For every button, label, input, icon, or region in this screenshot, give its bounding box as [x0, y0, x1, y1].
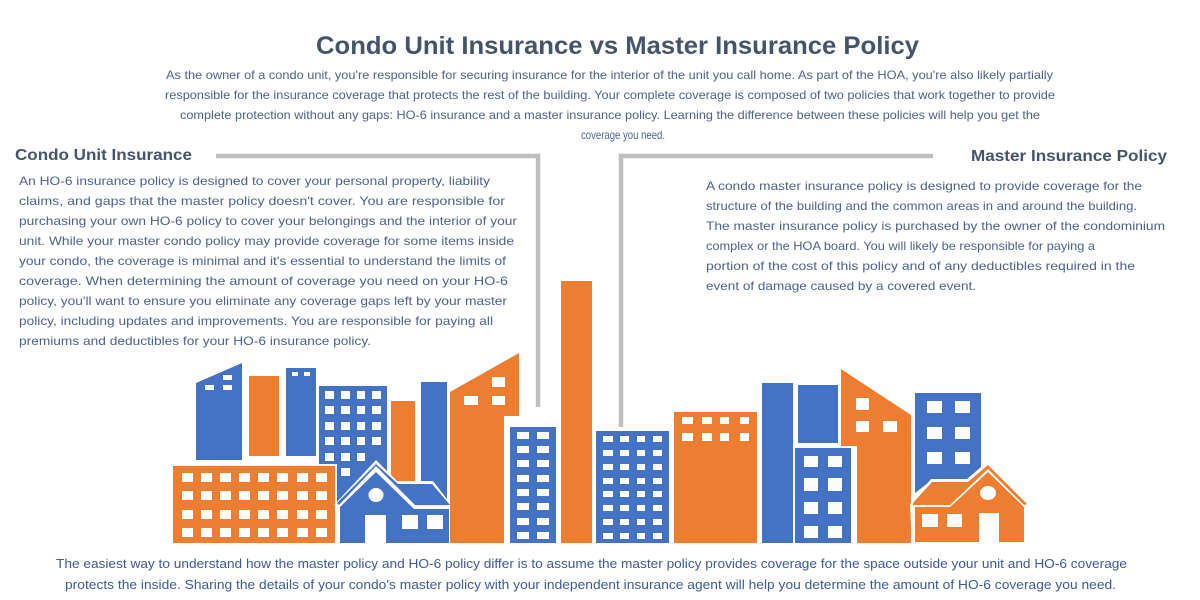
text block: condo unit insurance: An HO-6 insurance policy is designed to cover your personal property, liability	[19, 174, 490, 188]
text block: condo unit insurance	[19, 174, 517, 348]
text block: master insurance policy: The master insurance policy is purchased by the owner of the condominium	[706, 219, 1165, 233]
connector: left heading to buildings	[216, 156, 538, 407]
text block: condo unit insurance: policy, you'll want to ensure you eliminate any coverage gaps left by your master	[19, 294, 507, 308]
intro text block: complete protection without any gaps: HO-6 insurance and a master insurance policy. Learning the difference between these policies will help you get the	[180, 108, 1040, 122]
text block: condo unit insurance: claims, and gaps that the master policy doesn't cover. You are responsible for	[19, 194, 505, 208]
building: orange apartment block	[171, 464, 337, 545]
intro text block	[165, 68, 1055, 142]
connector: right heading to buildings	[621, 156, 933, 427]
building: blue tower centre right	[596, 431, 669, 543]
text block: master insurance policy: A condo master insurance policy is designed to provide coverage for the	[706, 179, 1142, 193]
text block: condo unit insurance: unit. While your master condo policy may provide coverage for some items inside	[19, 234, 514, 248]
text block: condo unit insurance: policy, including updates and improvements. You are responsible for paying all	[19, 314, 493, 328]
icon: orange house	[910, 461, 1030, 545]
text block: master insurance policy: complex or the HOA board. You will likely be responsible for paying a	[706, 239, 1095, 253]
title: Condo Unit Insurance vs Master Insurance Policy	[316, 32, 919, 60]
footer text block: protects the inside. Sharing the details of your condo's master policy with your independent insurance agent will help you determine the amount of HO-6 coverage you need.	[65, 578, 1116, 592]
text block: condo unit insurance: your condo, the coverage is minimal and it's essential to understand the limits of	[19, 254, 507, 268]
text block: condo unit insurance: purchasing your own HO-6 policy to cover your belongings and the interior of your	[19, 214, 517, 228]
text block: master insurance policy: portion of the cost of this policy and of any deductibles required in the	[706, 259, 1135, 273]
icon: blue house	[334, 460, 453, 545]
illustration: city skyline right	[674, 369, 1030, 545]
footer text block	[56, 557, 1127, 592]
intro text block: As the owner of a condo unit, you're responsible for securing insurance for the interior of the unit you call home. As part of the HOA, you're also likely partially	[166, 68, 1053, 82]
illustration: city skyline left	[171, 353, 519, 545]
heading: condo unit insurance: Condo Unit Insurance	[15, 147, 192, 164]
text block: condo unit insurance: coverage. When determining the amount of coverage you need on your HO-6	[19, 274, 508, 288]
building: blue tower centre left	[510, 427, 556, 543]
heading: master insurance policy: Master Insurance Policy	[971, 148, 1167, 165]
text block: master insurance policy: event of damage caused by a covered event.	[706, 279, 976, 293]
text block: master insurance policy	[706, 179, 1165, 293]
footer text block: The easiest way to understand how the master policy and HO-6 policy differ is to assume the master policy provides coverage for the space outside your unit and HO-6 coverage	[56, 557, 1127, 571]
intro text block: responsible for the insurance coverage that protects the rest of the building. Your complete coverage is composed of two policies that work together to provide	[165, 88, 1055, 102]
text block: master insurance policy: structure of the building and the common areas in and around the building.	[706, 199, 1137, 213]
building: tall orange tower	[561, 281, 592, 543]
text block: condo unit insurance: premiums and deductibles for your HO-6 insurance policy.	[19, 334, 371, 348]
intro text block: coverage you need.	[581, 128, 665, 142]
